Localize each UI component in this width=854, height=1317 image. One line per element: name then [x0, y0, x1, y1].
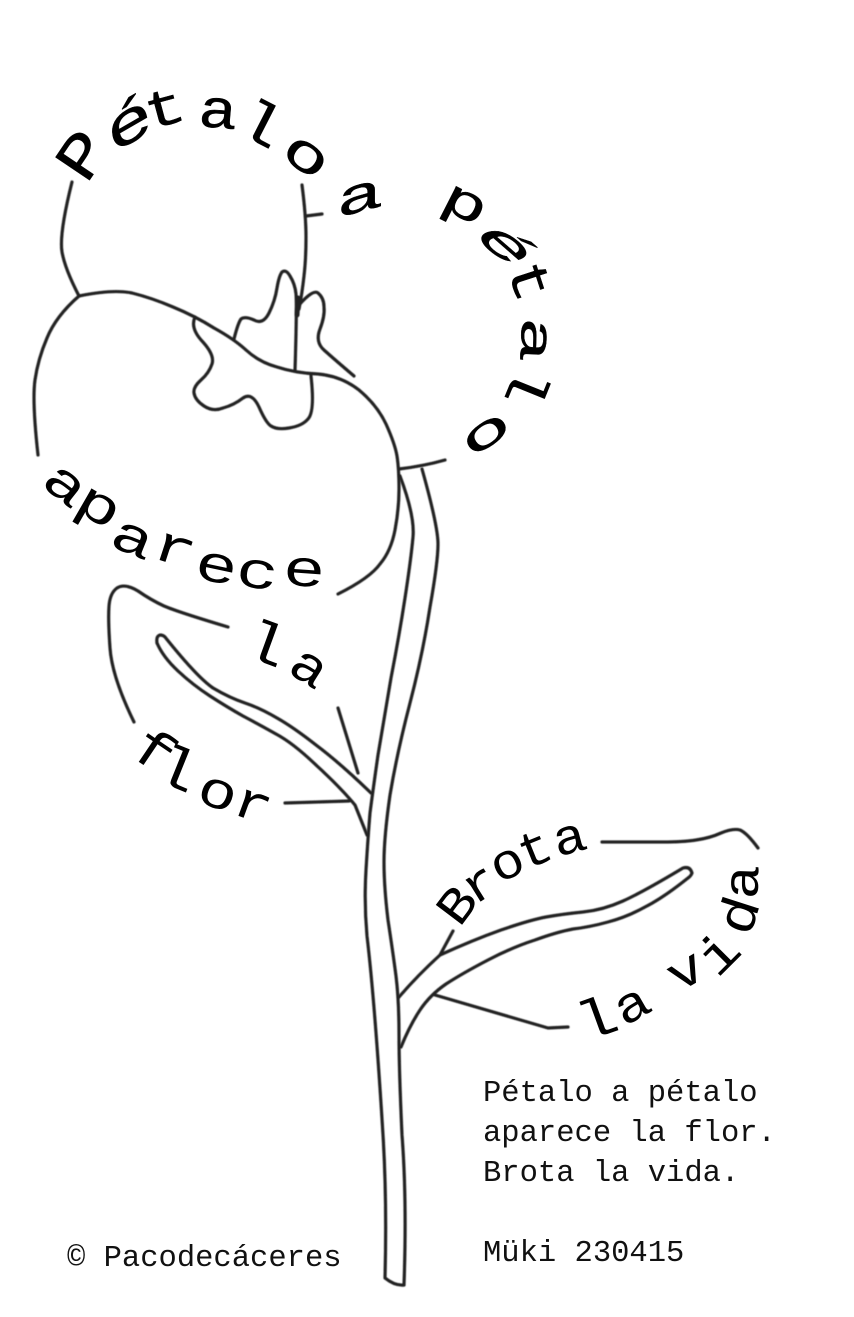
curved text: Pétalo a pétalo: é [454, 219, 552, 273]
curved text: Brota la vida: B [427, 876, 493, 938]
curved text: Pétalo a pétalo [43, 78, 561, 470]
curved text: Pétalo a pétalo: a [506, 316, 561, 364]
curved text: Pétalo a pétalo: a [196, 81, 240, 147]
curved text: aparece: e [189, 535, 243, 602]
curved text: Pétalo a pétalo: p [431, 171, 497, 241]
curved text: Pétalo a pétalo: a [337, 164, 383, 234]
curved text: Brota la vida: r [452, 853, 510, 919]
curved text: Pétalo a pétalo: é [101, 81, 159, 172]
curved text: aparece: c [232, 542, 282, 607]
curved text: Brota la vida [427, 808, 776, 1059]
curved text: Pétalo a pétalo: o [269, 120, 342, 195]
curved text: aparece: p [64, 471, 132, 544]
lower leaf [399, 829, 758, 1047]
curved text: Pétalo a pétalo: t [138, 78, 193, 146]
flower drawing [34, 182, 445, 594]
curved text: la flor: f [119, 718, 186, 791]
curved text: aparece: r [145, 516, 203, 585]
curved text: aparece: a [30, 450, 99, 523]
curved text: la flor: l [145, 735, 207, 810]
curved text: Brota la vida: i [687, 922, 755, 990]
curved text: la flor: a [278, 635, 339, 704]
curved text: la flor: o [189, 760, 246, 829]
curved text: Brota la vida: a [717, 864, 774, 900]
curved text: Pétalo a pétalo: P [43, 118, 127, 196]
poem text block: Pétalo a pétalo [483, 1077, 758, 1111]
curved text: Brota la vida: a [604, 974, 662, 1041]
curved text: Brota la vida: d [708, 890, 776, 943]
curved text: Pétalo a pétalo: t [491, 254, 561, 310]
curved text: Brota la vida: o [481, 832, 535, 898]
poem text block: aparece la flor. [483, 1117, 776, 1151]
stem [365, 469, 438, 1285]
curved text: la flor [119, 610, 339, 841]
curved text: aparece [30, 450, 327, 607]
poem text block: Müki 230415 [483, 1237, 684, 1271]
copyright: © Pacodecáceres [67, 1242, 342, 1276]
curved text: aparece: e [281, 542, 327, 603]
curved text: aparece: a [102, 505, 163, 576]
curved text: Pétalo a pétalo: l [226, 90, 293, 166]
curved text: Pétalo a pétalo: o [450, 399, 522, 470]
curved text: la flor: l [235, 610, 296, 685]
curved text: Brota la vida: l [570, 987, 628, 1059]
curved text: Pétalo a pétalo: l [489, 355, 559, 416]
poem text block [483, 1077, 776, 1271]
curved text: Brota la vida: v [657, 939, 717, 1007]
poem text block: Brota la vida. [483, 1157, 739, 1191]
curved text: Brota la vida: t [510, 819, 562, 884]
curved text: la flor: r [224, 773, 280, 841]
upper leaf [109, 586, 371, 835]
curved text: Brota la vida: a [547, 808, 593, 872]
